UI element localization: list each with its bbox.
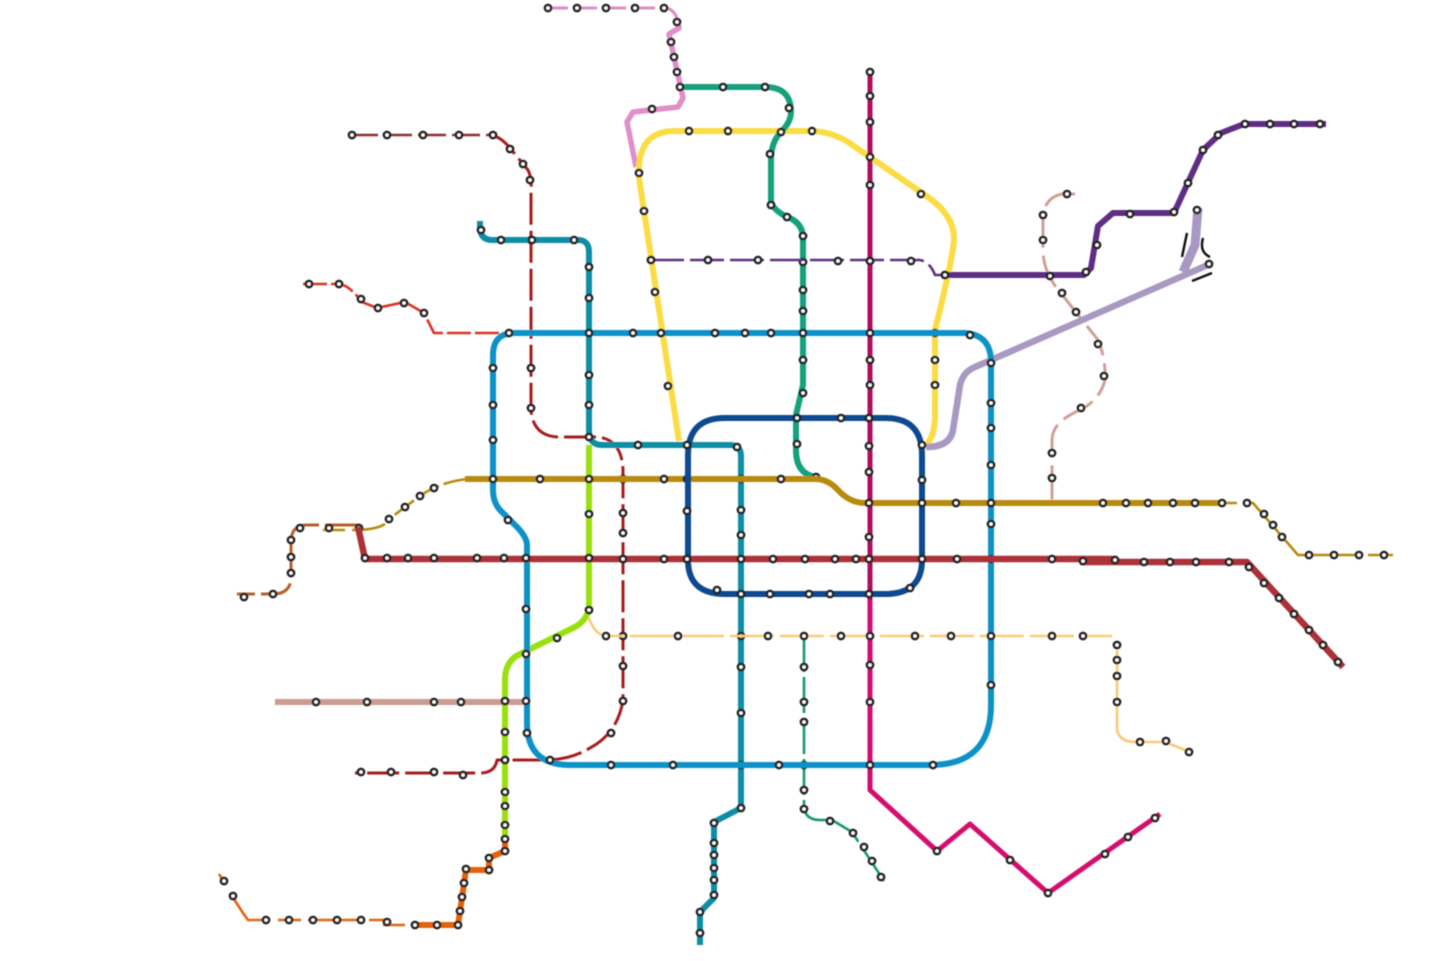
- line: green north-south line: [677, 84, 819, 480]
- line: brown-pink dashed northeast branch: [1040, 191, 1107, 503]
- line: orange southwest line: [219, 836, 508, 928]
- line: green dashed south branch: [801, 633, 884, 881]
- line: red-orange west branch: [303, 281, 510, 333]
- line: salmon spur west: [275, 699, 527, 705]
- line: navy inner ring: [684, 415, 925, 597]
- interchange stations on upper layers: [502, 330, 994, 763]
- line: pink north branch: [544, 5, 683, 167]
- line: magenta north-south line: [866, 69, 1160, 896]
- line: peach dashed south line: [589, 618, 1192, 755]
- line: outer ring blue: [490, 330, 994, 768]
- line: lavender airport line: [926, 207, 1212, 447]
- line: purple northeast line: [648, 121, 1326, 279]
- line: ochre east-west line: [237, 476, 1393, 600]
- line: red dashed northwest line: [349, 132, 626, 778]
- line: lime green west line: [502, 445, 592, 850]
- line: dark red east-west line: [358, 527, 1343, 667]
- line: yellow loop line: [636, 128, 954, 446]
- line: teal line with west hook and south branch: [478, 221, 744, 945]
